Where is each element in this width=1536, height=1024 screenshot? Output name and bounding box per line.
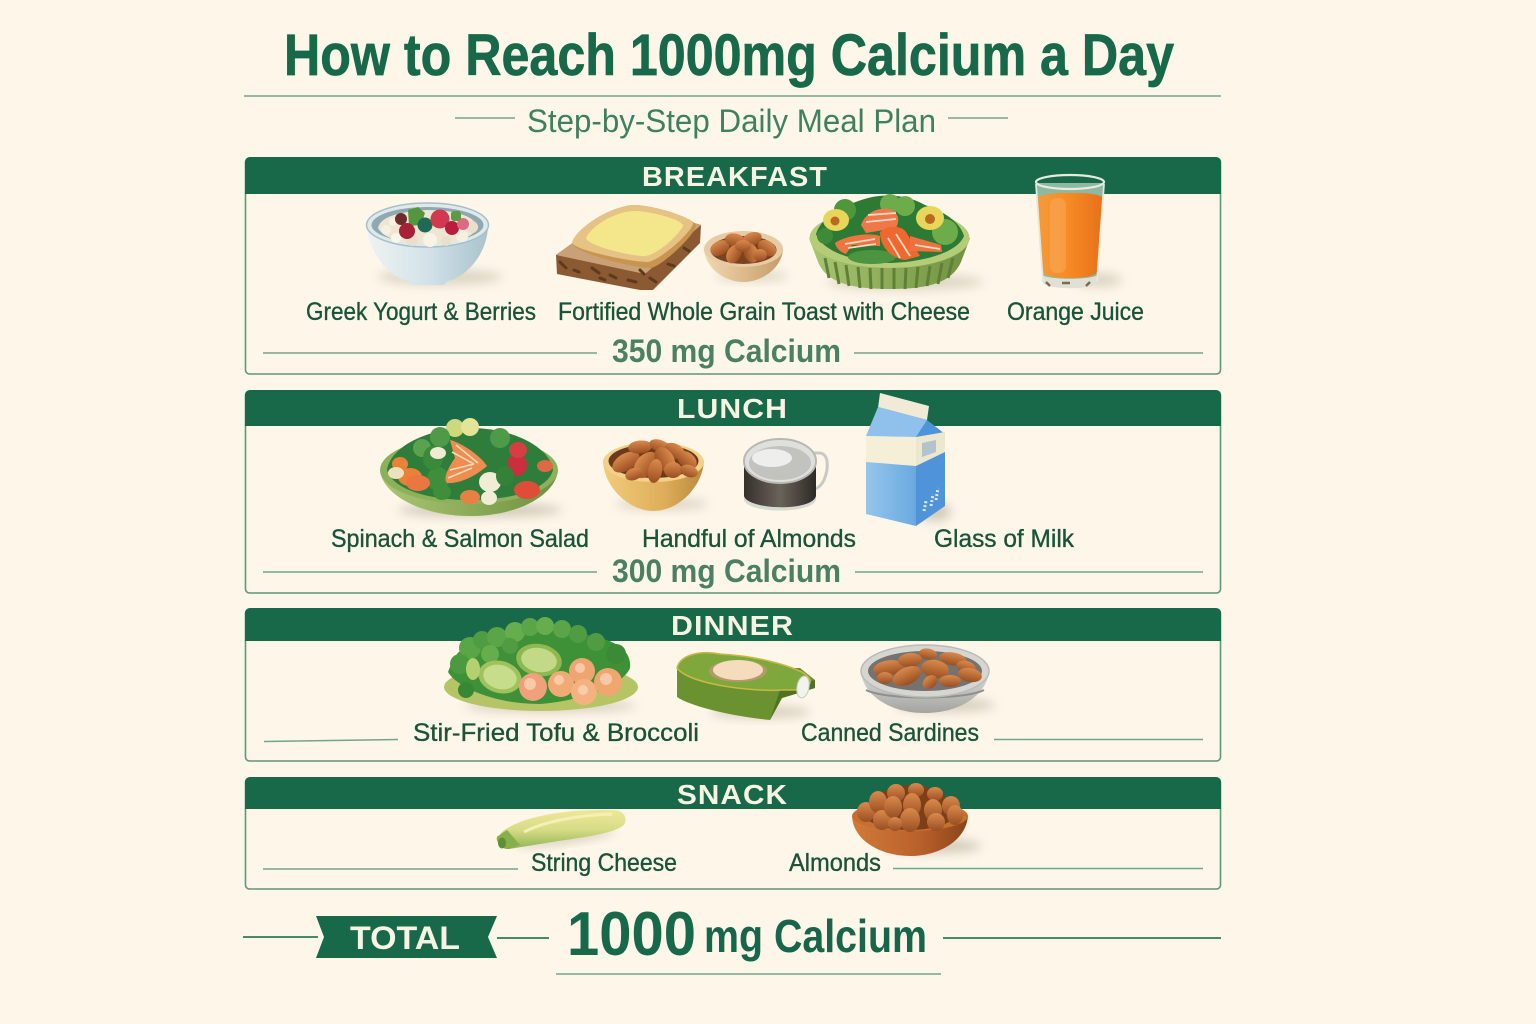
total banner	[243, 916, 549, 958]
dinner header: DINNER	[671, 610, 794, 641]
icon: clay bowl of almonds	[852, 783, 981, 856]
breakfast calcium: 350 mg Calcium	[612, 333, 841, 369]
total banner: TOTAL	[350, 920, 460, 956]
subtitle: Step-by-Step Daily Meal Plan	[527, 103, 936, 139]
snack header	[245, 777, 1221, 810]
label: toast: Fortified Whole Grain Toast with Cheese	[558, 298, 970, 326]
icon: green tin	[677, 653, 815, 720]
lunch header: LUNCH	[677, 393, 788, 424]
icon: toast with cheese	[556, 205, 701, 290]
icon: orange juice glass	[1036, 175, 1122, 288]
breakfast header: BREAKFAST	[642, 161, 828, 192]
label: sardines: Canned Sardines	[801, 719, 979, 747]
dinner divider right	[994, 738, 1203, 740]
label: milk: Glass of Milk	[934, 525, 1074, 553]
icon: tofu and broccoli plate	[444, 617, 638, 712]
breakfast header	[245, 157, 1221, 194]
panel: snack	[245, 777, 1221, 889]
label: tofu and broccoli: Stir-Fried Tofu & Broccoli	[413, 719, 699, 747]
icon: salmon salad dish	[809, 194, 983, 290]
total amount: 1000	[567, 900, 696, 969]
icon: yogurt bowl	[366, 203, 502, 285]
label: almonds snack: Almonds	[789, 849, 881, 877]
panel: breakfast	[245, 157, 1221, 374]
label: string cheese: String Cheese	[531, 849, 677, 877]
total amount: mg Calcium	[704, 910, 927, 962]
label: almonds: Handful of Almonds	[642, 525, 856, 553]
title: How to Reach 1000mg Calcium a Day	[284, 23, 1174, 88]
label: spinach salad: Spinach & Salmon Salad	[331, 525, 589, 553]
panel: lunch	[245, 390, 1221, 593]
lunch header	[245, 390, 1221, 426]
icon: almond bowl	[603, 437, 708, 511]
dinner divider left	[264, 740, 398, 742]
icon: spinach and salmon salad	[380, 418, 562, 517]
snack divider right	[893, 868, 1203, 870]
total amount	[556, 900, 1221, 974]
icon: milk carton	[866, 393, 951, 526]
dinner header	[245, 608, 1221, 641]
panel: dinner	[245, 608, 1221, 761]
icon: gray bowl with sardines	[861, 645, 995, 713]
icon: small almond bowl	[704, 229, 788, 282]
icon: string cheese	[497, 810, 625, 850]
snack header: SNACK	[677, 779, 788, 810]
lunch calcium: 300 mg Calcium	[612, 553, 841, 589]
label: greek yogurt: Greek Yogurt & Berries	[306, 298, 536, 326]
label: orange juice: Orange Juice	[1007, 298, 1144, 326]
icon: open can	[744, 439, 827, 510]
snack divider left	[263, 868, 518, 870]
